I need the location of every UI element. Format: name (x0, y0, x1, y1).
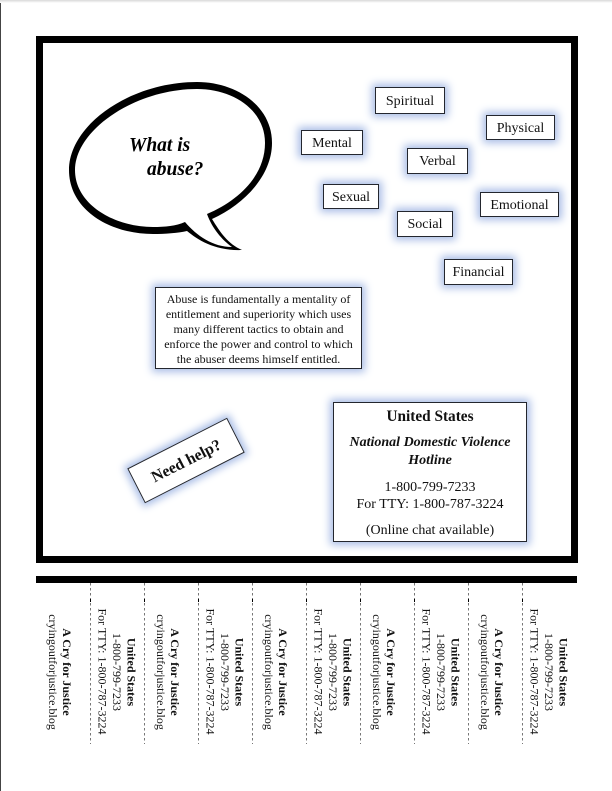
strip 1: blog: cryingoutforjustice.blog (46, 614, 60, 730)
label: Mental: Mental (312, 136, 352, 150)
definition box: Abuse is fundamentally a mentality of (167, 292, 350, 306)
strip 9: blog (478, 614, 506, 730)
hotline name: National Domestic Violence (350, 435, 510, 450)
label: Social (397, 211, 453, 237)
hotline box (333, 402, 527, 542)
need help tag (127, 418, 245, 503)
definition box (155, 287, 362, 369)
hotline country: United States (386, 408, 474, 425)
strip 2: hotline: 1-800-799-7233 (110, 633, 124, 711)
hotline numbers: 1-800-799-7233 (384, 480, 476, 494)
strip 4: hotline: 1-800-799-7233 (218, 633, 232, 711)
hotline numbers: For TTY: 1-800-787-3224 (356, 497, 504, 512)
hotline numbers (356, 480, 504, 512)
strip 10: hotline (528, 608, 570, 734)
strip 1: blog (46, 614, 74, 730)
label: Mental (301, 130, 363, 155)
strip 8: hotline: 1-800-799-7233 (434, 633, 448, 711)
strip 4: hotline (204, 608, 246, 734)
strip 1: blog: A Cry for Justice (60, 628, 74, 716)
strip 7: blog: cryingoutforjustice.blog (370, 614, 384, 730)
strip 7: blog: A Cry for Justice (384, 628, 398, 716)
strip 6: hotline (312, 608, 354, 734)
hotline chat note: (Online chat available) (366, 522, 494, 538)
strip 6: hotline: For TTY: 1-800-787-3224 (312, 608, 326, 734)
strip 6: hotline: United States (340, 638, 354, 706)
label: Sexual (323, 184, 379, 209)
bubble text: What is abuse?: abuse? (147, 159, 203, 180)
strip 9: blog: A Cry for Justice (492, 628, 506, 716)
label: Financial: Financial (452, 265, 505, 280)
main frame (36, 36, 578, 563)
strip 5: blog (262, 614, 290, 730)
page edge line (0, 0, 1, 791)
definition box: many different tactics to obtain and (173, 322, 344, 336)
strip 5: blog: A Cry for Justice (276, 628, 290, 716)
label: Verbal: Verbal (419, 154, 456, 169)
strip 8: hotline: For TTY: 1-800-787-3224 (420, 608, 434, 734)
strip 10: hotline: 1-800-799-7233 (542, 633, 556, 711)
strip 10: hotline: For TTY: 1-800-787-3224 (528, 608, 542, 734)
hotline name: Hotline (408, 453, 452, 468)
label: Spiritual (375, 87, 445, 114)
strip 4: hotline: For TTY: 1-800-787-3224 (204, 608, 218, 734)
definition box: enforce the power and control to which (164, 336, 353, 350)
strip 8: hotline (420, 608, 462, 734)
label: Social: Social (408, 217, 442, 232)
strip 8: hotline: United States (448, 638, 462, 706)
label: Physical: Physical (497, 120, 544, 136)
strip 7: blog (370, 614, 398, 730)
definition box: the abuser deems himself entitled. (177, 352, 340, 366)
label: Emotional: Emotional (490, 198, 549, 212)
strip 6: hotline: 1-800-799-7233 (326, 633, 340, 711)
label: Physical (486, 115, 555, 140)
bubble text: What is abuse?: What is (129, 135, 190, 156)
strip 2: hotline (96, 608, 138, 734)
strip 2: hotline: For TTY: 1-800-787-3224 (96, 608, 110, 734)
label: Sexual: Sexual (332, 190, 370, 204)
strip 9: blog: cryingoutforjustice.blog (478, 614, 492, 730)
strip 5: blog: cryingoutforjustice.blog (262, 614, 276, 730)
tear-off top bar (36, 576, 577, 583)
strip 3: blog: cryingoutforjustice.blog (154, 614, 168, 730)
strip 2: hotline: United States (124, 638, 138, 706)
label: Spiritual: Spiritual (386, 94, 434, 108)
label: Verbal (407, 148, 468, 174)
need help tag: Need help? (149, 436, 224, 486)
bubble text: What is abuse? (129, 135, 203, 180)
strip 3: blog (154, 614, 182, 730)
hotline name (349, 435, 510, 468)
strip 3: blog: A Cry for Justice (168, 628, 182, 716)
page top shading (0, 0, 612, 3)
definition box: entitlement and superiority which uses (166, 306, 351, 320)
strip 4: hotline: United States (232, 638, 246, 706)
strip 10: hotline: United States (556, 638, 570, 706)
label: Emotional (480, 192, 559, 217)
label: Financial (444, 259, 513, 285)
